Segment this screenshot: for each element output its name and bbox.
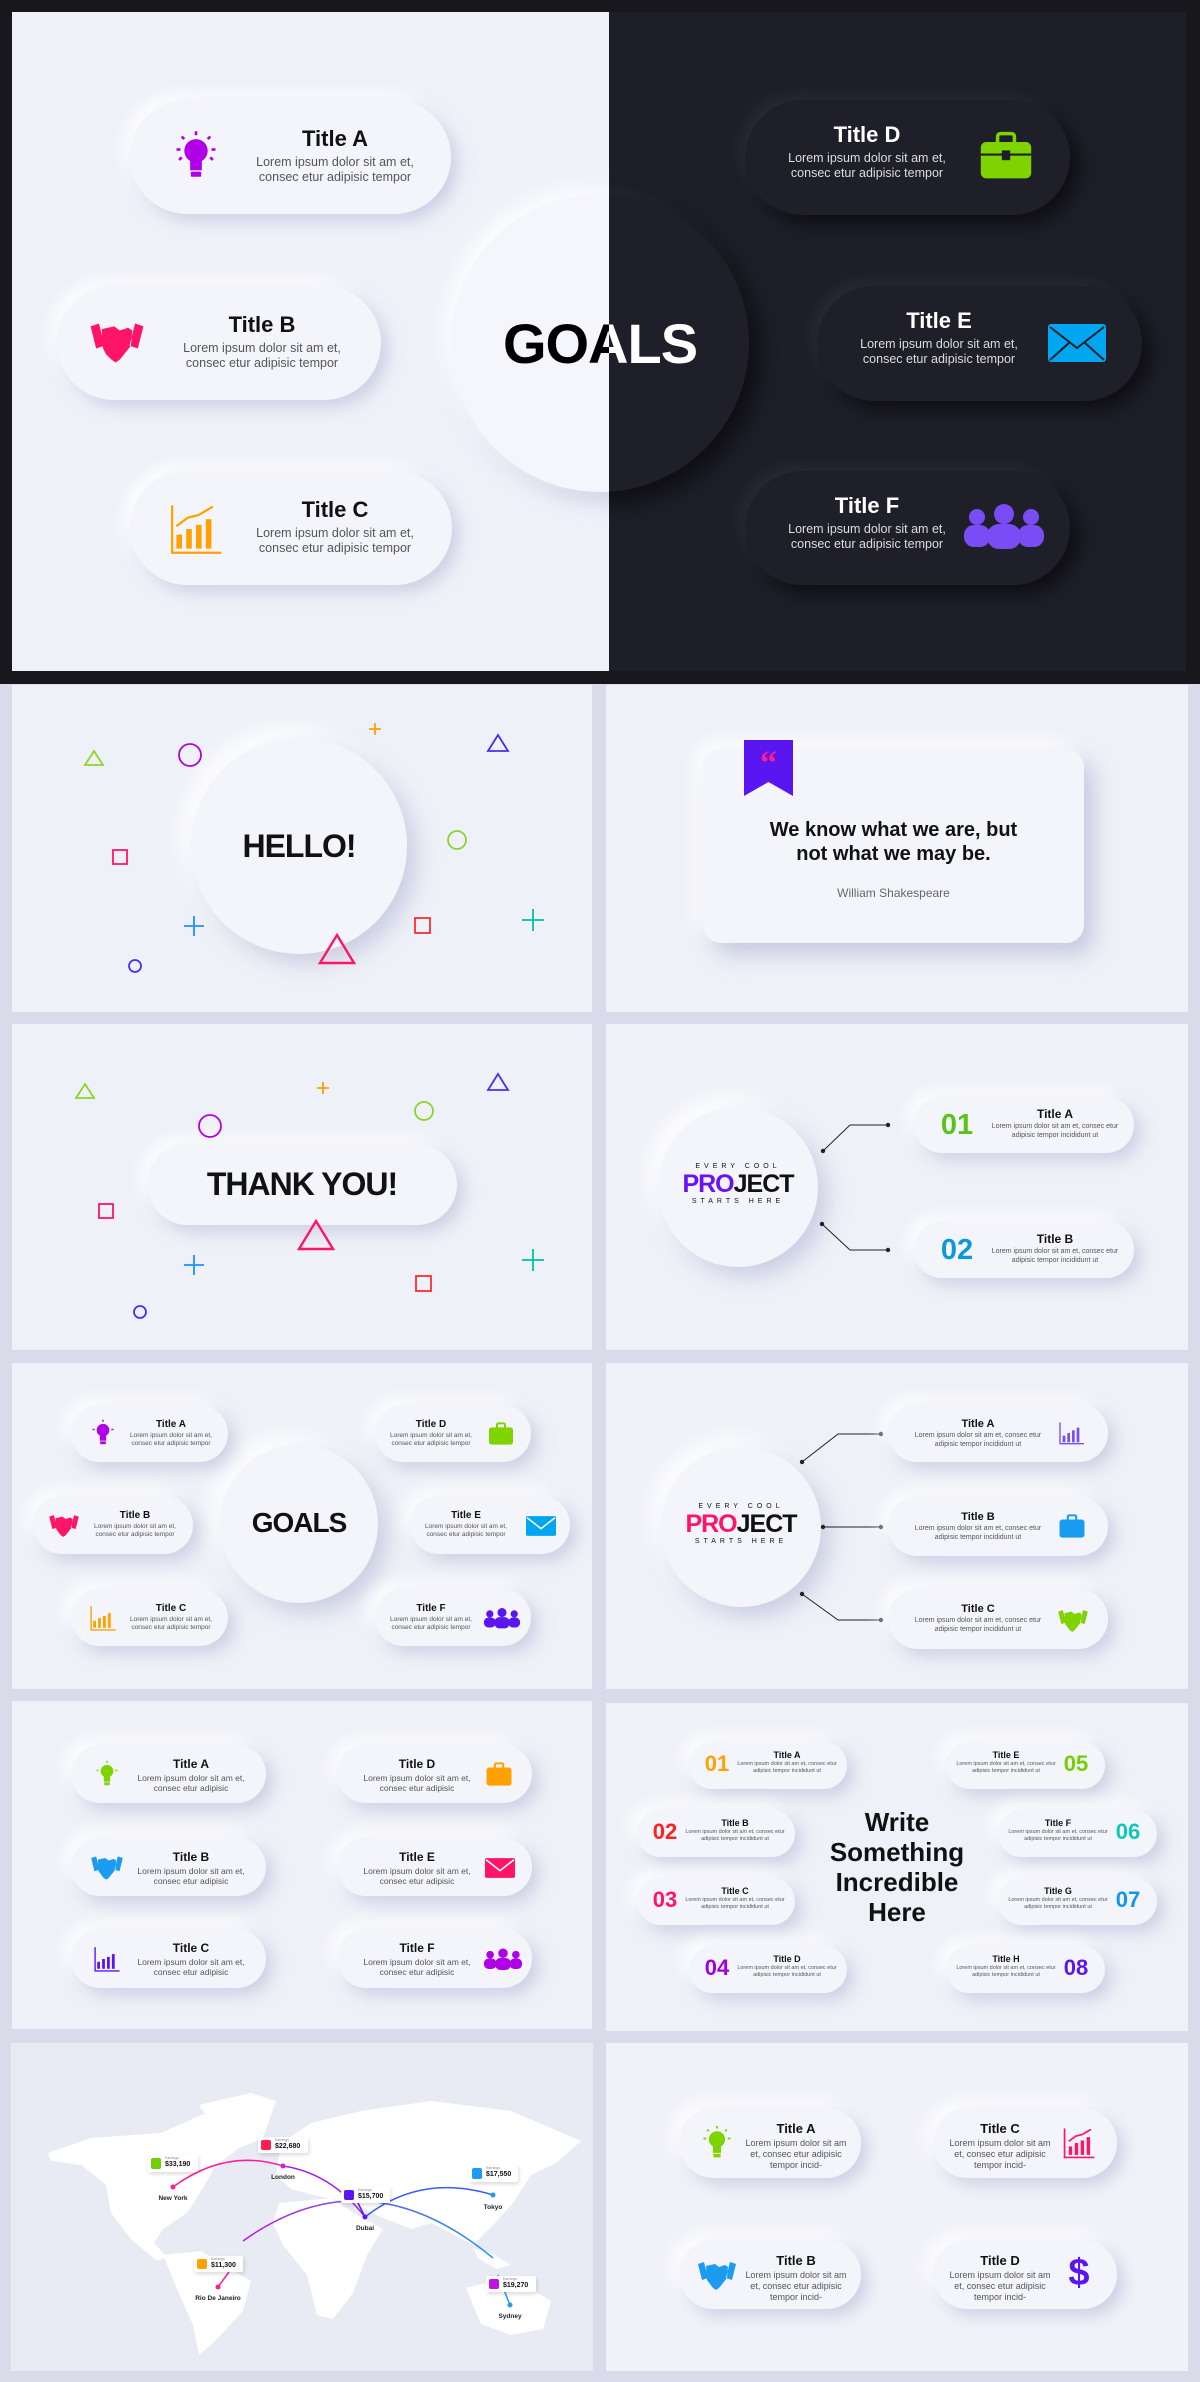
project circle xyxy=(661,1447,821,1607)
pill D: Lorem ipsum dolor sit am et, consec etur adipisic xyxy=(363,1773,471,1793)
pill C small: Lorem ipsum dolor sit am et, xyxy=(130,1616,212,1623)
pill 08: Title H xyxy=(992,1954,1020,1964)
text B: consec etur adipisic tempor xyxy=(186,356,338,370)
pill B: Title B xyxy=(776,2253,816,2268)
map with routes: Sydney xyxy=(498,2313,522,2320)
thank you pill xyxy=(147,1144,457,1225)
icon: handshake xyxy=(90,324,144,362)
pill B small: Lorem ipsum dolor sit am et, xyxy=(94,1523,176,1530)
text F: Title F xyxy=(835,493,899,518)
pill 02 xyxy=(637,1810,795,1857)
pill A: Title A xyxy=(173,1757,209,1771)
pill B: Lorem ipsum dolor sit am et, consec etur adipisic xyxy=(137,1866,245,1886)
pill 04: Lorem ipsum dolor sit am et, consec etur adipisic tempor incididunt ut xyxy=(737,1965,837,1978)
pill 07: Lorem ipsum dolor sit am et, consec etur adipisic tempor incididunt ut xyxy=(1008,1897,1108,1910)
pill B: Title B xyxy=(173,1850,209,1864)
icon: chart xyxy=(171,505,222,554)
pill C small: consec etur adipisic tempor xyxy=(131,1624,211,1631)
pill A xyxy=(888,1404,1108,1462)
pill A: Lorem ipsum dolor sit am et, consec etur adipisic tempor incididunt ut xyxy=(915,1432,1041,1448)
central text: Something xyxy=(830,1837,964,1867)
pill 01 xyxy=(914,1097,1134,1153)
text E xyxy=(860,308,1018,366)
pill 01: Title A xyxy=(1037,1107,1073,1121)
text D: Title D xyxy=(834,122,900,147)
decorative shapes xyxy=(83,723,544,973)
hero pill: Title C xyxy=(130,471,452,585)
pill B small: Title B xyxy=(120,1510,150,1521)
panel: hero light half xyxy=(12,12,609,671)
pill 02: Title B xyxy=(1037,1232,1073,1246)
project label: EVERY COOL xyxy=(698,1503,784,1510)
hero title GOALS: GOALS xyxy=(503,312,697,375)
hero goals circle xyxy=(450,192,764,508)
pill E small: consec etur adipisic tempor xyxy=(426,1531,506,1538)
callout New York xyxy=(148,2155,198,2172)
hello circle xyxy=(191,738,407,954)
pill 01 xyxy=(689,1742,847,1789)
callout Dubai: Earnings xyxy=(358,2188,372,2192)
pill D: Lorem ipsum dolor sit am et, consec etur adipisic tempor incid- xyxy=(949,2270,1051,2302)
text D: Lorem ipsum dolor sit am et, xyxy=(788,151,946,165)
central text: Incredible xyxy=(836,1867,958,1897)
text C: Title C xyxy=(302,497,368,522)
callout London: Earnings xyxy=(275,2138,289,2142)
quote card xyxy=(703,749,1084,943)
pill 03: 03 xyxy=(653,1887,677,1912)
icon: people xyxy=(964,504,1044,549)
pill 06: Title F xyxy=(1045,1818,1071,1828)
pill D xyxy=(337,1745,532,1803)
connector lines xyxy=(800,1432,884,1622)
panel: project three steps xyxy=(606,1363,1188,1689)
map with routes: London xyxy=(271,2174,295,2181)
pill 02: Lorem ipsum dolor sit am et, consec etur adipisic tempor incididunt ut xyxy=(685,1829,785,1842)
decorative shapes xyxy=(74,1072,544,1319)
quote text: We know what we are, but xyxy=(770,819,1017,841)
project label: PROJECT xyxy=(682,1170,794,1198)
pill C small: Title C xyxy=(156,1603,186,1614)
icon: bookmark quote: “ xyxy=(760,745,777,782)
text F: consec etur adipisic tempor xyxy=(791,537,943,551)
icon: bookmark quote xyxy=(744,740,793,796)
text E: Title E xyxy=(906,308,972,333)
text E: consec etur adipisic tempor xyxy=(863,352,1015,366)
callout New York: $33,190 xyxy=(165,2161,190,2168)
quote text xyxy=(770,819,1017,865)
pill 01: 01 xyxy=(705,1751,729,1776)
callout Rio xyxy=(194,2256,243,2272)
pill A: Lorem ipsum dolor sit am et, consec etur adipisic tempor incid- xyxy=(745,2138,847,2170)
pill B xyxy=(71,1838,266,1896)
pill A: Lorem ipsum dolor sit am et, consec etur adipisic xyxy=(137,1773,245,1793)
callout Sydney: $19,270 xyxy=(503,2282,528,2289)
hero title GOALS: GOALS xyxy=(503,312,697,375)
central text: Here xyxy=(868,1897,926,1927)
heading GOALS small: GOALS xyxy=(252,1507,346,1538)
hero pill: Title E xyxy=(817,286,1142,401)
map with routes xyxy=(48,2093,581,2355)
panel: quote xyxy=(606,685,1188,1012)
pill 08 xyxy=(946,1946,1105,1993)
pill A xyxy=(679,2108,861,2178)
map with routes: Tokyo xyxy=(484,2204,502,2211)
dark half of circle xyxy=(609,240,764,507)
pill A small xyxy=(71,1405,228,1462)
pill 05: 05 xyxy=(1064,1751,1088,1776)
pill F xyxy=(337,1929,532,1988)
icon: envelope xyxy=(1048,324,1106,362)
pill B: Lorem ipsum dolor sit am et, consec etur adipisic tempor incididunt ut xyxy=(915,1525,1041,1540)
pill B xyxy=(888,1497,1108,1556)
pill B small: consec etur adipisic tempor xyxy=(95,1531,175,1538)
hero pill: Title A xyxy=(130,100,451,214)
hero title GOALS xyxy=(505,324,696,364)
project label: STARTS HERE xyxy=(695,1538,787,1545)
callout London xyxy=(258,2137,308,2153)
central text xyxy=(830,1807,964,1927)
pill 02: 02 xyxy=(653,1819,677,1844)
pill C xyxy=(71,1929,266,1988)
pill A: Title A xyxy=(961,1418,994,1430)
project label: EVERY COOL xyxy=(695,1163,781,1170)
pill 05: Lorem ipsum dolor sit am et, consec etur adipisic tempor incididunt ut xyxy=(956,1761,1056,1774)
heading HELLO: HELLO! xyxy=(242,828,356,864)
pill A small: Title A xyxy=(156,1419,186,1430)
pill 05: Title E xyxy=(993,1750,1019,1760)
pill C: Lorem ipsum dolor sit am et, consec etur adipisic xyxy=(137,1957,245,1977)
pill E small xyxy=(410,1496,570,1554)
pill B small xyxy=(33,1496,193,1554)
pill E small: Title E xyxy=(451,1510,481,1521)
pill F small: Lorem ipsum dolor sit am et, xyxy=(390,1616,472,1623)
project label: STARTS HERE xyxy=(692,1198,784,1205)
text B: Title B xyxy=(229,312,295,337)
pill 07: Title G xyxy=(1044,1886,1072,1896)
text A: Title A xyxy=(302,126,368,151)
text A: consec etur adipisic tempor xyxy=(259,170,411,184)
pill B xyxy=(679,2240,861,2309)
pill 01: Lorem ipsum dolor sit am et, consec etur adipisic tempor incididunt ut xyxy=(737,1761,837,1774)
pill 01: Lorem ipsum dolor sit am et, consec etur adipisic tempor incididunt ut xyxy=(992,1123,1118,1138)
text B: Lorem ipsum dolor sit am et, xyxy=(183,341,341,355)
pill C xyxy=(933,2108,1117,2178)
pill A xyxy=(71,1745,266,1803)
connector lines xyxy=(820,1122,890,1252)
pill D xyxy=(933,2240,1117,2309)
project label xyxy=(685,1503,798,1545)
pill C: Title C xyxy=(173,1941,209,1955)
callout Rio: $11,300 xyxy=(211,2262,236,2269)
panel: world map xyxy=(11,2043,593,2371)
panel: project two steps xyxy=(606,1024,1188,1350)
pill E: Lorem ipsum dolor sit am et, consec etur adipisic xyxy=(363,1866,471,1886)
text D xyxy=(788,122,946,180)
callout London: $22,680 xyxy=(275,2143,300,2150)
text C xyxy=(256,497,414,555)
light half of circle xyxy=(450,192,609,508)
pill D small xyxy=(375,1405,531,1462)
pill 06: 06 xyxy=(1116,1819,1140,1844)
pill 06 xyxy=(998,1810,1157,1857)
hero pill: Title B xyxy=(57,286,381,400)
pill 02: Title B xyxy=(721,1818,749,1828)
pill 08: 08 xyxy=(1064,1955,1088,1980)
pill 03: Lorem ipsum dolor sit am et, consec etur adipisic tempor incididunt ut xyxy=(685,1897,785,1910)
pill D small: Title D xyxy=(416,1419,446,1430)
text C: consec etur adipisic tempor xyxy=(259,541,411,555)
panel: goals small xyxy=(12,1363,592,1689)
quote author: William Shakespeare xyxy=(837,886,950,900)
callout Dubai: $15,700 xyxy=(358,2193,383,2200)
pill 01: Title A xyxy=(773,1750,800,1760)
map with routes: Dubai xyxy=(356,2225,374,2232)
pill 02: Lorem ipsum dolor sit am et, consec etur adipisic tempor incididunt ut xyxy=(992,1248,1118,1264)
pill C: Title C xyxy=(980,2121,1020,2136)
text E: Lorem ipsum dolor sit am et, xyxy=(860,337,1018,351)
pill C small xyxy=(71,1589,228,1646)
pill C: Title C xyxy=(961,1603,995,1615)
pill C: Lorem ipsum dolor sit am et, consec etur adipisic tempor incididunt ut xyxy=(915,1617,1041,1632)
pill D small: consec etur adipisic tempor xyxy=(391,1440,471,1447)
text F: Lorem ipsum dolor sit am et, xyxy=(788,522,946,536)
pill F small xyxy=(375,1589,531,1646)
pill B: Lorem ipsum dolor sit am et, consec etur adipisic tempor incid- xyxy=(745,2270,847,2302)
icon: bulb xyxy=(176,131,216,177)
pill D small: Lorem ipsum dolor sit am et, xyxy=(390,1432,472,1439)
text B xyxy=(183,312,341,370)
callout Dubai xyxy=(341,2187,390,2203)
callout Sydney: Earnings xyxy=(503,2277,517,2281)
project label xyxy=(682,1163,794,1205)
pill E small: Lorem ipsum dolor sit am et, xyxy=(425,1523,507,1530)
callout New York: Earnings xyxy=(165,2156,179,2160)
project label: PROJECT xyxy=(685,1510,797,1538)
text F xyxy=(788,493,946,551)
pill E: Title E xyxy=(399,1850,435,1864)
pill C: Lorem ipsum dolor sit am et, consec etur adipisic tempor incid- xyxy=(949,2138,1051,2170)
pill 04: 04 xyxy=(705,1955,729,1980)
hero pill: Title D xyxy=(745,100,1070,215)
hero background frame xyxy=(0,0,1200,684)
pill 01: 01 xyxy=(941,1109,973,1141)
pill C xyxy=(888,1589,1108,1649)
pill A small: Lorem ipsum dolor sit am et, xyxy=(130,1432,212,1439)
callout Tokyo xyxy=(469,2165,518,2182)
panel: THANK YOU xyxy=(12,1024,592,1350)
heading THANK YOU: THANK YOU! xyxy=(207,1166,397,1202)
quote text: not what we may be. xyxy=(796,843,991,865)
panel: hero dark half xyxy=(609,12,1186,671)
pill 08: Lorem ipsum dolor sit am et, consec etur adipisic tempor incididunt ut xyxy=(956,1965,1056,1978)
goals circle xyxy=(220,1445,378,1603)
text A xyxy=(256,126,414,184)
pill 07 xyxy=(998,1878,1157,1925)
panel: six titles xyxy=(12,1701,592,2029)
pill F: Lorem ipsum dolor sit am et, consec etur adipisic xyxy=(363,1957,471,1977)
pill A small: consec etur adipisic tempor xyxy=(131,1440,211,1447)
pill 07: 07 xyxy=(1116,1887,1140,1912)
pill 02: 02 xyxy=(941,1234,973,1266)
project circle xyxy=(658,1107,818,1267)
pill A: Title A xyxy=(776,2121,816,2136)
central text: Write xyxy=(865,1807,929,1837)
panel: HELLO xyxy=(12,685,592,1012)
pill D: $ xyxy=(1068,2252,1090,2294)
pill 03 xyxy=(637,1878,795,1925)
pill E xyxy=(337,1838,532,1896)
map with routes: Rio De Janeiro xyxy=(195,2295,241,2302)
hero pill: Title F xyxy=(745,471,1070,585)
callout Tokyo: Earnings xyxy=(486,2166,500,2170)
pill B: Title B xyxy=(961,1511,995,1523)
text A: Lorem ipsum dolor sit am et, xyxy=(256,155,414,169)
icon: briefcase xyxy=(980,132,1032,178)
pill 05 xyxy=(946,1742,1105,1789)
callout Rio: Earnings xyxy=(211,2257,225,2261)
text C: Lorem ipsum dolor sit am et, xyxy=(256,526,414,540)
pill D: Title D xyxy=(980,2253,1020,2268)
pill D: Title D xyxy=(399,1757,435,1771)
callout Sydney xyxy=(486,2276,536,2292)
pill 06: Lorem ipsum dolor sit am et, consec etur adipisic tempor incididunt ut xyxy=(1008,1829,1108,1842)
text D: consec etur adipisic tempor xyxy=(791,166,943,180)
pill 03: Title C xyxy=(721,1886,749,1896)
pill 04: Title D xyxy=(773,1954,801,1964)
map with routes: New York xyxy=(158,2195,188,2202)
pill F: Title F xyxy=(399,1941,435,1955)
panel: eight numbered xyxy=(606,1703,1188,2031)
pill F small: Title F xyxy=(416,1603,446,1614)
callout Tokyo: $17,550 xyxy=(486,2171,511,2178)
pill 02 xyxy=(914,1222,1134,1278)
panel: four titles xyxy=(606,2043,1188,2371)
pill F small: consec etur adipisic tempor xyxy=(391,1624,471,1631)
pill 04 xyxy=(689,1946,847,1993)
